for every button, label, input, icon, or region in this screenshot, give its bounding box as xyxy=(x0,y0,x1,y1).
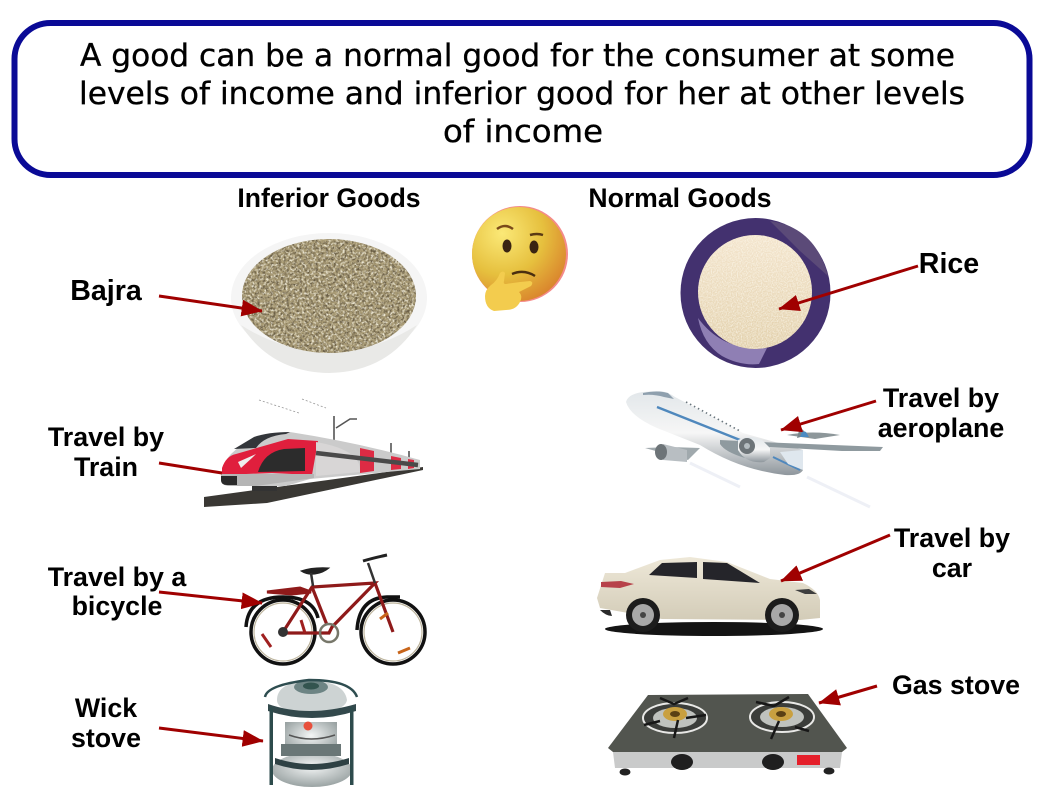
arrow: gas stove xyxy=(819,686,877,703)
label: wick stove: stove xyxy=(71,723,141,753)
title text: of income xyxy=(443,114,603,150)
image: car xyxy=(597,557,823,636)
label: travel by aeroplane: Travel by xyxy=(883,383,999,413)
arrow: bicycle xyxy=(159,592,262,603)
label: travel by aeroplane: aeroplane xyxy=(878,413,1004,443)
arrow: rice xyxy=(779,266,918,309)
label: wick stove: Wick xyxy=(75,693,137,723)
label: travel by a bicycle: Travel by a xyxy=(48,562,187,592)
title text: A good can be a normal good for the consumer at some xyxy=(80,38,955,74)
food image: plate of rice xyxy=(680,218,830,368)
image: bicycle xyxy=(246,555,425,664)
title text xyxy=(79,38,965,150)
label: travel by train: Travel by xyxy=(48,422,164,452)
image: gas stove xyxy=(608,694,847,776)
image: aeroplane xyxy=(626,391,883,507)
arrow: bajra xyxy=(159,296,262,311)
heading: normal goods: Normal Goods xyxy=(588,183,772,213)
label: bajra: Bajra xyxy=(70,275,143,307)
label: travel by car: Travel by xyxy=(894,523,1010,553)
title text: levels of income and inferior good for her at other levels xyxy=(79,76,965,112)
heading: inferior goods: Inferior Goods xyxy=(237,183,421,213)
arrow: car xyxy=(781,535,890,581)
label: gas stove: Gas stove xyxy=(892,670,1020,700)
label: travel by car: car xyxy=(932,553,973,583)
label: travel by train: Train xyxy=(74,452,138,482)
arrow: train xyxy=(159,463,222,473)
label: rice: Rice xyxy=(919,248,979,280)
label: travel by a bicycle: bicycle xyxy=(72,591,162,621)
title banner xyxy=(14,23,1030,175)
arrow: wick stove xyxy=(159,728,263,741)
image: wick stove xyxy=(265,680,357,787)
icon: thinking face emoji xyxy=(472,206,568,311)
food image: bowl of bajra xyxy=(231,233,427,373)
image: train xyxy=(204,399,423,507)
arrow: aeroplane xyxy=(781,401,876,430)
